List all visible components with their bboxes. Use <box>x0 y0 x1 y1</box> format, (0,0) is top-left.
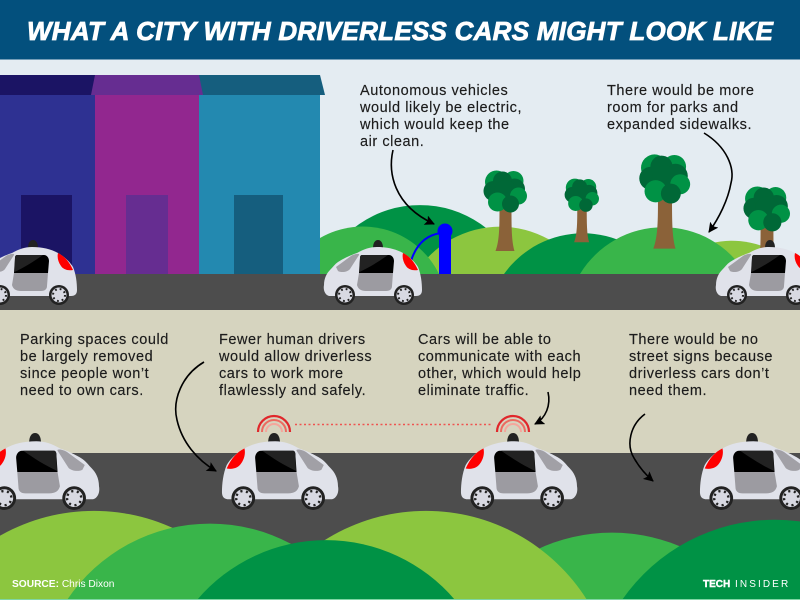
signal waves: left car <box>258 416 290 432</box>
car: lower right <box>700 433 800 510</box>
callout: parking spaces: be largely removed <box>20 349 153 365</box>
callout: electric vehicles: Autonomous vehicles <box>360 83 508 99</box>
building: teal <box>199 75 325 274</box>
car: lower far left <box>0 433 99 510</box>
callout: communication: Cars will be able to <box>418 332 552 348</box>
arrow: to second car <box>176 362 216 471</box>
callout: parking spaces: since people won’t <box>20 366 149 382</box>
callout: parking spaces: need to own cars. <box>20 383 144 399</box>
header banner <box>0 0 800 60</box>
building: blue <box>0 75 95 274</box>
tree one <box>484 170 527 251</box>
callout: parks and sidewalks: expanded sidewalks. <box>607 117 752 133</box>
callout: fewer human drivers: Fewer human drivers <box>219 332 366 348</box>
tree four <box>743 186 790 273</box>
callout: communication: communicate with each <box>418 349 581 365</box>
callout: fewer human drivers: cars to work more <box>219 366 344 382</box>
car: upper right <box>716 240 800 305</box>
callout: parking spaces: Parking spaces could <box>20 332 169 348</box>
source credit: SOURCE: Chris Dixon <box>12 579 114 590</box>
car: upper middle <box>324 240 422 305</box>
sky background <box>0 60 800 310</box>
building: purple <box>91 75 203 274</box>
arrow: to empty road <box>630 414 653 481</box>
callout: electric vehicles: which would keep the <box>359 117 510 133</box>
upper road <box>0 274 800 310</box>
title: WHAT A CITY WITH DRIVERLESS CARS MIGHT LOOK LIKE <box>27 16 774 46</box>
car: upper left <box>0 240 77 305</box>
signal waves: right car <box>497 416 529 432</box>
arrow: to charging station <box>391 150 434 224</box>
arrow: to parks <box>704 133 732 232</box>
callout: street signs: street signs because <box>629 349 773 365</box>
callout: electric vehicles: would likely be electric, <box>359 100 522 116</box>
callout: parks and sidewalks: There would be more <box>607 83 754 99</box>
callout: fewer human drivers: flawlessly and safely. <box>219 383 366 399</box>
logo: Tech Insider: TECH <box>703 579 730 590</box>
upper landscape hills <box>320 205 800 274</box>
callout: parks and sidewalks: room for parks and <box>607 100 739 116</box>
callout: street signs: need them. <box>629 383 707 399</box>
car: lower third <box>461 433 577 510</box>
callout: communication: other, which would help <box>418 366 581 382</box>
charging station <box>411 224 452 274</box>
logo: Tech Insider: INSIDER <box>735 579 790 590</box>
callout: fewer human drivers: would allow driverless <box>218 349 372 365</box>
beige ground band <box>0 310 800 453</box>
car: lower second <box>222 433 338 510</box>
tree three <box>639 154 690 249</box>
callout: communication: eliminate traffic. <box>418 383 529 399</box>
callout: electric vehicles: air clean. <box>360 134 424 150</box>
tree two <box>565 179 599 242</box>
callout: street signs: driverless cars don’t <box>629 366 770 382</box>
arrow: to signal <box>535 392 549 424</box>
callout: street signs: There would be no <box>629 332 758 348</box>
lower road <box>0 453 800 600</box>
lower foreground hills <box>0 511 800 600</box>
row of buildings <box>0 75 325 274</box>
dotted communication link <box>295 424 492 426</box>
large hill <box>580 227 746 274</box>
